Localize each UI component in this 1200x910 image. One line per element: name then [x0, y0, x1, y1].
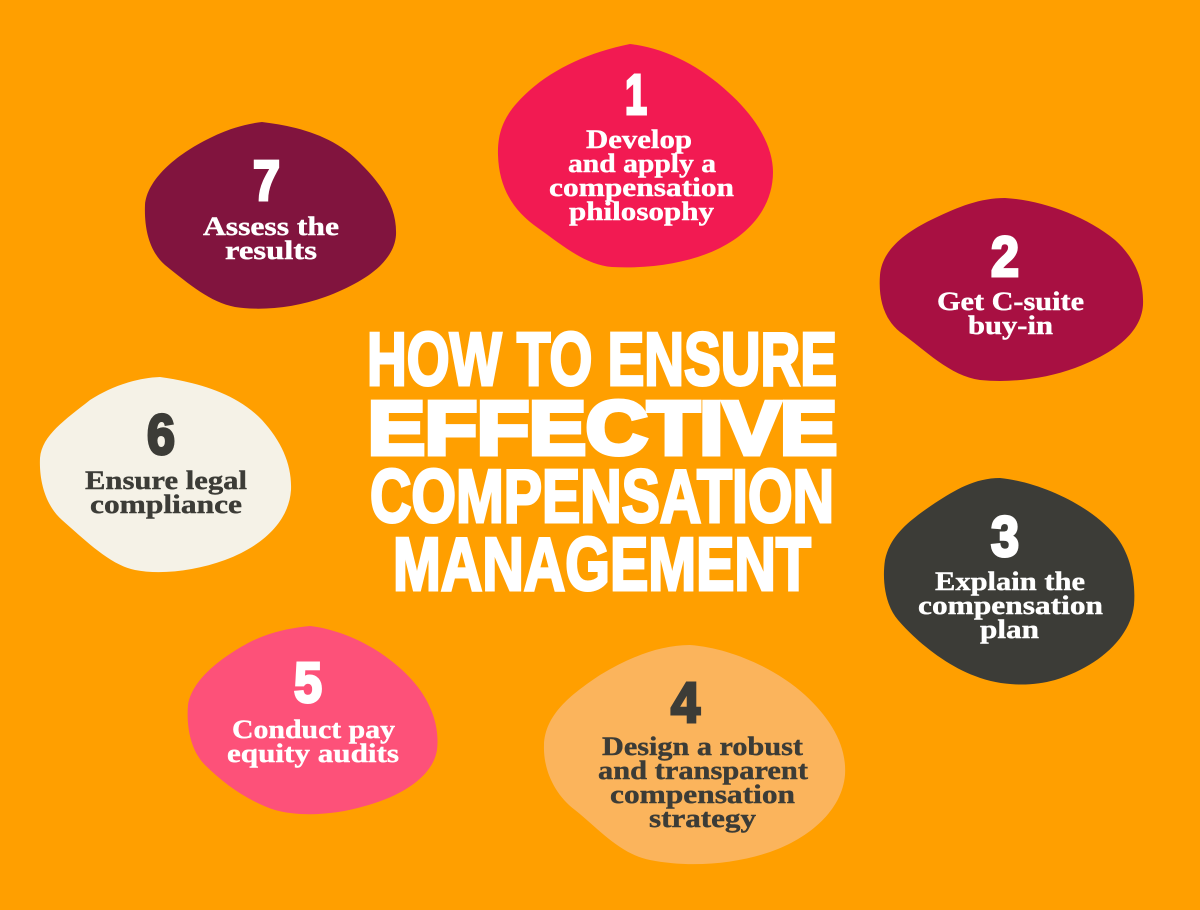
step 7 blob: [145, 122, 396, 309]
step 2 label: [937, 287, 1084, 340]
step 2 label: Get C-suite: [937, 287, 1084, 316]
step 6 number: 6: [147, 403, 175, 467]
step 4 label: [598, 732, 808, 833]
step 7 label: results: [225, 236, 317, 265]
title: HOW TO ENSURE: [367, 317, 837, 401]
step 4 label: and transparent: [598, 756, 808, 785]
step 3 label: compensation: [918, 591, 1104, 620]
step 3 number: 3: [991, 505, 1019, 569]
step 2 blob: [880, 198, 1143, 381]
title: MANAGEMENT: [393, 522, 811, 606]
step 4 label: Design a robust: [602, 732, 803, 761]
step 7 number: 7: [253, 149, 280, 213]
step 5 label: equity audits: [227, 739, 399, 768]
step 4 number: 4: [671, 671, 700, 735]
step 5 number: 5: [294, 651, 322, 715]
step 3 blob: [884, 478, 1134, 685]
step 2 number: 2: [991, 225, 1019, 289]
step 7 label: [203, 212, 339, 265]
step 4 label: strategy: [649, 804, 756, 833]
step 2 label: buy-in: [968, 311, 1054, 340]
step 6 label: compliance: [90, 490, 242, 519]
step 1 number: 1: [625, 63, 647, 127]
title: COMPENSATION: [370, 454, 834, 538]
step 6 blob: [40, 377, 291, 572]
step 5 blob: [188, 626, 438, 814]
step 1 blob: [498, 44, 773, 267]
title: EFFECTIVE: [368, 386, 837, 470]
step 5 label: Conduct pay: [232, 715, 395, 744]
step 1 label: compensation: [549, 173, 735, 202]
step 4 label: compensation: [610, 780, 796, 809]
title: [367, 317, 837, 606]
step 1 label: Develop: [586, 125, 692, 154]
step 1 label: and apply a: [568, 149, 716, 178]
step 3 label: Explain the: [935, 567, 1085, 596]
step 3 label: plan: [980, 615, 1040, 644]
step 3 label: [918, 567, 1104, 644]
step 6 label: Ensure legal: [85, 466, 247, 495]
step 6 label: [85, 466, 247, 519]
step 7 label: Assess the: [203, 212, 339, 241]
step 4 blob: [544, 645, 845, 864]
step 5 label: [227, 715, 399, 768]
step 1 label: [549, 125, 735, 226]
step 1 label: philosophy: [569, 197, 714, 226]
